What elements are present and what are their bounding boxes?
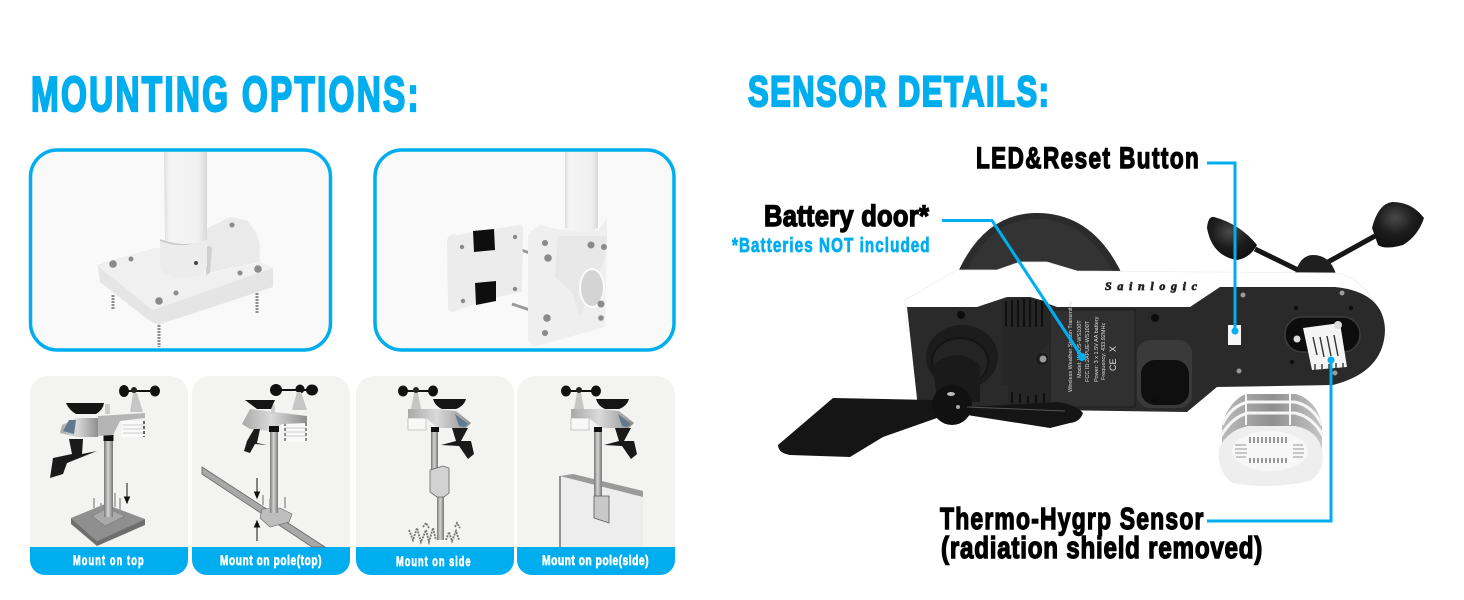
leader line: thermo-hygro sensor: [1207, 356, 1334, 521]
rain bowl: [596, 399, 629, 409]
anemometer: [125, 390, 156, 392]
heading: sensor details: SENSOR DETAILS:: [748, 67, 1049, 115]
battery door: [1050, 310, 1135, 407]
clamp bolts: [512, 247, 530, 310]
panel: flat surface mount photo: [30, 150, 330, 350]
collar: [160, 240, 207, 278]
arrows: [254, 478, 260, 541]
label: LED and reset button: LED&Reset Button: [976, 141, 1199, 175]
panel screws: [1236, 290, 1344, 376]
LED reset button: [1228, 325, 1241, 345]
bolts: [263, 495, 285, 509]
thermo shield: [571, 418, 589, 430]
vane ball: [932, 385, 1065, 425]
anemometer: [1207, 202, 1424, 274]
card: mount on side: [356, 376, 514, 575]
upper pole: [431, 428, 438, 470]
leader line: LED and reset: [1207, 163, 1238, 334]
anemometer: [403, 390, 433, 392]
compliance label: [1068, 301, 1118, 392]
radiation shield: [1219, 393, 1323, 486]
body: [242, 409, 307, 431]
anemometer: [566, 390, 596, 392]
note: batteries not included: *Batteries NOT included: [732, 234, 930, 257]
oval mounting hole: [580, 269, 604, 307]
compliance label: CE: [1108, 358, 1118, 371]
rain bowl: [245, 400, 275, 409]
compliance label: Power: 3 x 1.5V AA battery: [1094, 316, 1100, 382]
wind direction hub: [926, 325, 998, 402]
compliance label: Frequency: 433.92MHz: [1101, 323, 1107, 380]
wall: [560, 474, 643, 547]
front plate: [528, 218, 607, 347]
body: [98, 413, 145, 436]
rain bowl: [66, 403, 104, 414]
wood screws: [113, 293, 257, 347]
pole: [104, 438, 113, 517]
heading: mounting options: MOUNTING OPTIONS:: [31, 67, 419, 122]
clamp: [260, 508, 292, 527]
panel: pole clamp mount photo: [375, 150, 674, 350]
label: Mount on pole(side): [542, 552, 649, 568]
saddle housing: [205, 217, 260, 273]
compliance label: FCC ID:2APUE-WS100T: [1085, 320, 1091, 382]
concrete base: [71, 504, 145, 541]
plate fasteners: [109, 222, 262, 305]
rain funnel dish: [958, 213, 1121, 272]
install arrow: [124, 483, 130, 503]
base plate: [98, 248, 273, 325]
thermo shield: [284, 423, 307, 442]
fasteners: [460, 235, 607, 336]
lower pole: [437, 495, 444, 540]
card: mount on pole top: [192, 376, 350, 575]
anemometer: [276, 389, 316, 391]
mount socket: [1137, 340, 1192, 408]
bracket plate: [594, 496, 609, 523]
pole: [164, 152, 207, 244]
compliance label: Model: WSDS-WS100T: [1077, 320, 1083, 378]
thermo-hygro sensor: [1303, 323, 1347, 370]
wind vane: [778, 398, 1083, 457]
card: mount on top: [30, 376, 188, 575]
wind vane: [244, 429, 267, 453]
wind vane: [441, 428, 474, 459]
small holes: [957, 306, 1353, 404]
label: radiation shield removed: (radiation shield removed): [941, 530, 1262, 565]
thermo shield: [408, 418, 426, 430]
label: Mount on pole(top): [220, 552, 322, 568]
sensor unit illustration: [778, 202, 1424, 457]
body: [571, 409, 634, 428]
compliance label: X: [1108, 346, 1118, 352]
wind vane: [604, 428, 637, 459]
bolts: [94, 493, 120, 513]
horizontal rail: [202, 467, 325, 547]
pole: [270, 431, 278, 513]
door screw: [1036, 353, 1048, 365]
wind vane: [50, 439, 97, 478]
pole: [565, 152, 598, 232]
white upper shell: [905, 262, 1384, 340]
brand name: Sainlogic: [1105, 279, 1198, 293]
thermo shield: [122, 421, 145, 437]
label: thermo-hygro sensor: Thermo-Hygrp Sensor: [940, 501, 1204, 536]
vent slots: [1006, 299, 1044, 403]
card: mount on pole side: [517, 376, 675, 575]
pole: [594, 428, 602, 498]
label: battery door: Battery door*: [764, 199, 929, 232]
compliance label: Wireless Weather Station Transmitter: [1068, 301, 1074, 392]
label: Mount on top: [73, 552, 144, 569]
grass: [409, 523, 460, 542]
side bracket: [430, 466, 449, 497]
rear clamp half: [447, 225, 523, 312]
label: Mount on side: [396, 553, 471, 570]
black underside face: [907, 287, 1385, 412]
body: [408, 409, 471, 428]
vent plate: [1002, 297, 1052, 407]
leader line: battery door: [942, 220, 1086, 361]
rain bowl: [433, 399, 466, 409]
sensor cavity: [1285, 317, 1360, 352]
